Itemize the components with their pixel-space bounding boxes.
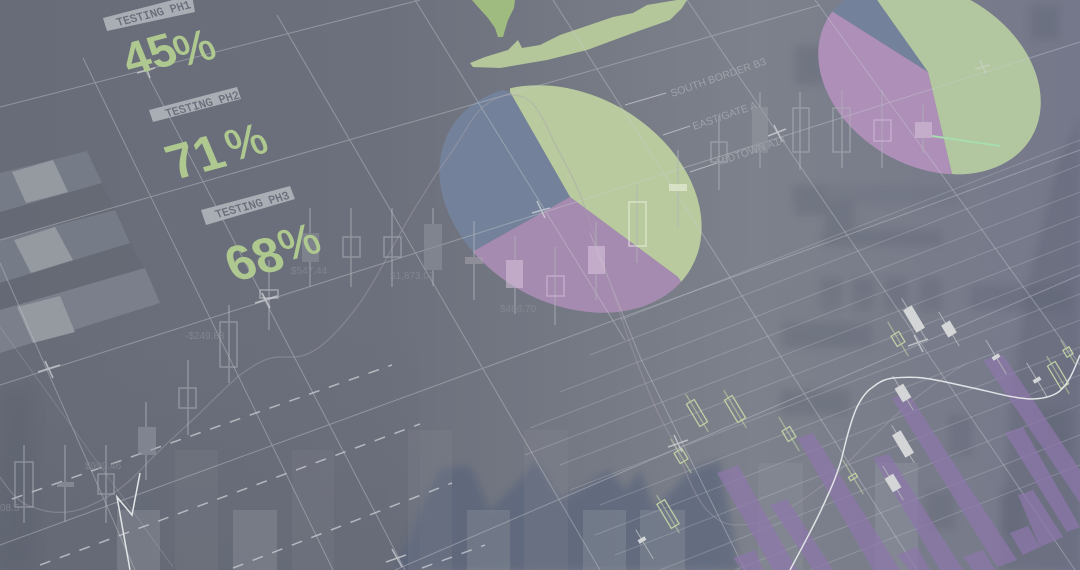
candlestick value labels: 08.5 (0, 503, 20, 514)
testing phase 3 stat: 68 (216, 226, 292, 292)
candlestick value labels: $468.70 (500, 304, 537, 315)
bar chart: purple slanted bars (717, 355, 1080, 570)
testing phase 3 stat: % (271, 215, 328, 270)
pie chart: large (440, 85, 702, 313)
dashed lines (12, 365, 485, 568)
horizontal bars panel (0, 151, 160, 353)
region labels with leader lines (625, 56, 787, 172)
candlestick value labels (0, 266, 537, 514)
zigzag line: white (117, 473, 140, 570)
testing phase 1 stat: % (166, 21, 223, 76)
ruled lines: lower right (525, 140, 1080, 570)
bottom columns (117, 430, 918, 570)
testing phase 2 stat: % (218, 115, 275, 170)
candlesticks: slanted white (632, 296, 1051, 561)
region labels with leader lines: EAST/GATE A (691, 100, 759, 133)
testing phase 1 stat: 45 (114, 22, 184, 85)
trend curve: white (790, 355, 1080, 570)
testing phase 3 stat (201, 186, 328, 292)
candlestick value labels: $1,873.02 (390, 271, 435, 282)
trend curve: faint pink (0, 95, 967, 525)
candlestick chart: main row (15, 90, 932, 523)
crosshair markers (38, 60, 990, 567)
map: green land masses (470, 0, 687, 68)
region labels with leader lines: SOUTH BORDER B3 (669, 56, 768, 100)
pie chart: top right (818, 0, 1041, 174)
region labels with leader lines: MIDTOWN A14 (715, 134, 787, 169)
testing phase 1 stat (103, 0, 223, 85)
testing phase 2 stat: TESTING PH2 (164, 90, 242, 121)
testing phase 1 stat: TESTING PH1 (115, 0, 193, 30)
testing phase 2 stat (149, 87, 275, 190)
testing phase 3 stat: TESTING PH3 (214, 190, 292, 222)
candlestick value labels: $547.44 (291, 266, 328, 277)
candlesticks: slanted green (653, 320, 1078, 535)
candlestick value labels: $999.46 (85, 461, 122, 472)
candlestick value labels: -$249.83 (185, 331, 225, 342)
testing phase 2 stat: 71 (157, 124, 233, 190)
